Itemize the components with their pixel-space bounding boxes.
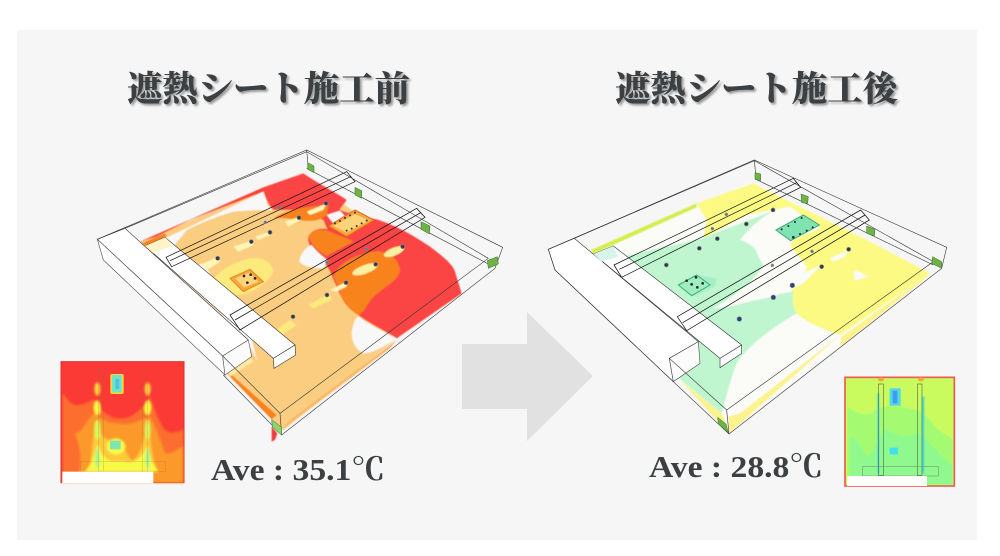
floor heat map: after <box>591 182 930 433</box>
vents: green <box>718 173 942 433</box>
inset contours: after <box>847 393 953 485</box>
average temperature: after: Ave : 28.8℃ <box>649 449 823 484</box>
inset outline <box>81 368 165 472</box>
structure: beams and ducts <box>548 160 947 434</box>
title: before: 遮熱シート施工前 <box>129 72 412 111</box>
heat source box: small <box>678 275 710 296</box>
arrow <box>462 312 593 441</box>
ceiling fixtures <box>216 201 405 319</box>
heat source box: large <box>328 210 374 237</box>
inset box: large <box>890 388 901 406</box>
inset box: small <box>890 448 898 454</box>
heat source box: small <box>230 269 263 292</box>
ceiling fixtures <box>664 208 851 321</box>
inset box: small <box>110 441 121 449</box>
structure: beams and ducts <box>97 150 503 435</box>
inset hot spots <box>878 377 924 381</box>
title: after: 遮熱シート施工後 <box>617 72 902 111</box>
inset cutout <box>847 476 927 486</box>
inset cutout <box>62 472 153 483</box>
inset contours: before <box>63 382 183 483</box>
inset outline <box>862 384 938 476</box>
average temperature: before: Ave : 35.1℃ <box>211 452 385 487</box>
vents: green <box>272 163 498 435</box>
title: after: 遮熱シート施工後 <box>615 70 900 109</box>
floor heat map: before <box>140 173 462 442</box>
inset box: large <box>110 374 124 394</box>
heat source box: large <box>776 215 819 241</box>
inset heat map: after <box>845 377 954 486</box>
3D model: before <box>97 150 503 442</box>
title: before: 遮熱シート施工前 <box>127 70 410 109</box>
3D model: after <box>548 160 947 434</box>
inset heat map: before <box>61 362 184 483</box>
